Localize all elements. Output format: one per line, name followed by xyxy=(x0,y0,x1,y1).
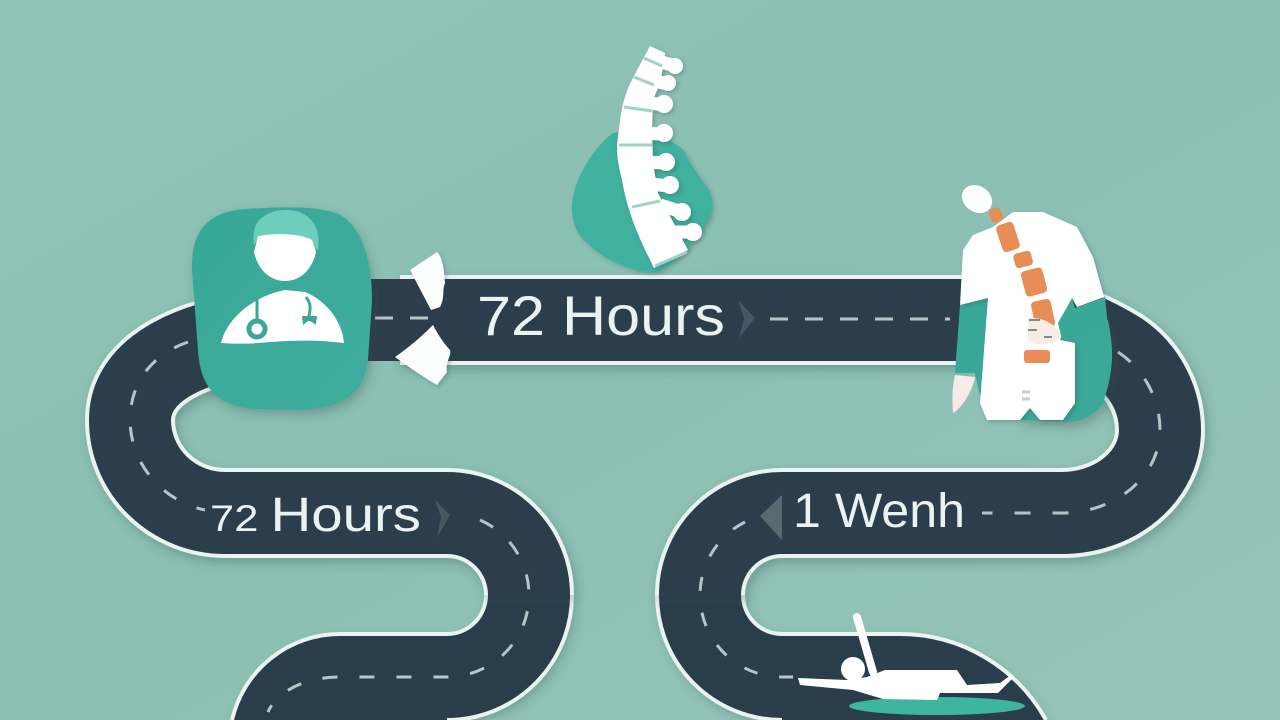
road: lower right bend xyxy=(657,595,1046,720)
patient head xyxy=(956,179,998,219)
stethoscope xyxy=(257,297,310,322)
icon: white bow shape xyxy=(395,252,450,385)
winding road xyxy=(130,318,1160,720)
doctor hair xyxy=(253,210,319,250)
icon: patient holding back xyxy=(952,179,1112,422)
doctor face xyxy=(254,234,316,281)
body detail xyxy=(1022,392,1030,399)
lying person head xyxy=(841,657,865,681)
spine vertebrae orange xyxy=(988,206,1056,363)
road: left section xyxy=(130,330,529,712)
icon: lying person on mat xyxy=(798,617,1025,715)
road: upper section xyxy=(300,318,1160,677)
stethoscope earpiece xyxy=(303,317,316,323)
arrow chevrons xyxy=(435,300,782,540)
spine discs xyxy=(619,58,687,266)
lying person body xyxy=(798,670,1013,700)
patient left hand xyxy=(952,375,975,413)
patient right sleeve xyxy=(1058,297,1108,340)
spine column xyxy=(617,46,702,268)
teal blob xyxy=(572,130,712,272)
patient back panel teal xyxy=(1020,320,1112,422)
icon: spine on teal blob xyxy=(572,46,712,272)
hand finger lines xyxy=(1028,320,1052,337)
label: 72 Hours on left road: 72 Hours xyxy=(210,489,421,542)
patient body xyxy=(960,212,1104,420)
lying person raised arm xyxy=(857,617,873,672)
road: lower left bend xyxy=(232,595,572,720)
icon: doctor tile xyxy=(192,207,372,410)
stethoscope chest piece xyxy=(249,321,265,337)
mat xyxy=(849,697,1025,715)
patient hand on back xyxy=(1028,318,1060,345)
doctor body xyxy=(221,290,344,344)
patient left sleeve xyxy=(955,298,988,403)
label: 1 Wenh on right road: 1 Wenh xyxy=(793,485,965,538)
label: 72 Hours on upper road: 72 Hours xyxy=(477,284,725,347)
